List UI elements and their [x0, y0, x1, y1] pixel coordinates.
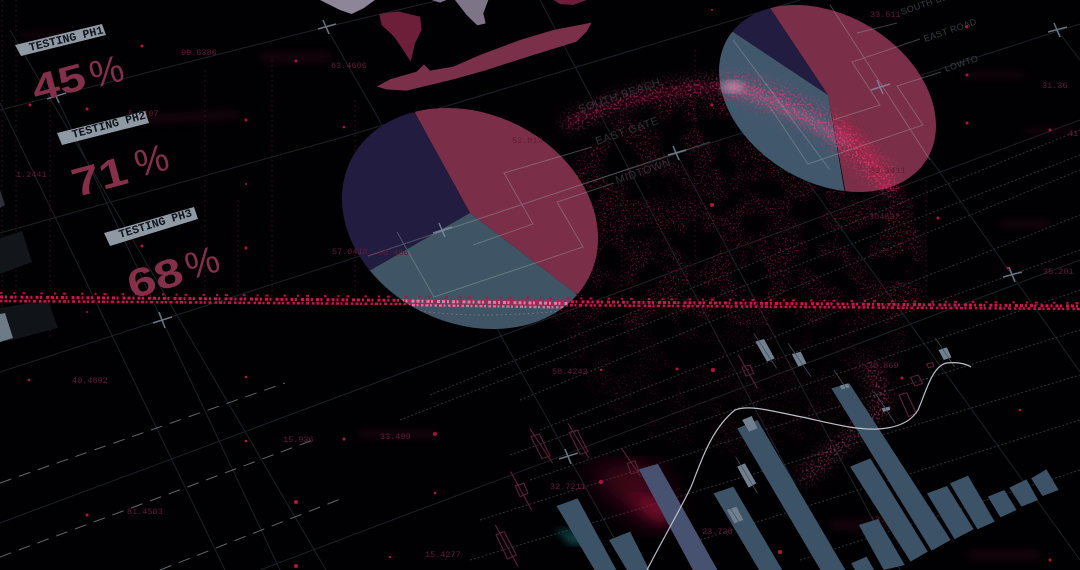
red numeric readouts: 50.406 — [378, 248, 409, 258]
North America — [320, 0, 375, 14]
stat 45 percent: % — [85, 48, 129, 97]
bottom red glow — [555, 463, 680, 545]
red numeric readouts: 32.7211 — [550, 482, 586, 492]
Asia fragment — [553, 0, 587, 5]
South America — [379, 11, 422, 62]
slice: slate — [370, 213, 577, 329]
trend curve — [647, 363, 971, 570]
red numeric readouts: 58.4243 — [552, 367, 588, 377]
slice: red — [770, 5, 936, 192]
particle band across pie 2 — [554, 65, 908, 492]
red numeric readouts: 30.869 — [868, 361, 899, 371]
location labels: LOWTO — [943, 53, 980, 74]
testing label 3: TESTING PH3 — [117, 207, 194, 242]
stat 45 percent: 45 — [27, 56, 90, 111]
stat 71 percent: 71 — [67, 149, 132, 206]
location labels: EAST ROAD — [922, 16, 978, 44]
red numeric readouts: 81.4583 — [127, 507, 163, 517]
red numeric readouts: 15.4277 — [425, 550, 461, 560]
Antarctica strip — [377, 23, 592, 91]
globe: particle field — [549, 76, 928, 458]
red numeric readouts: 99.6386 — [181, 48, 217, 58]
red numeric readouts: 63.4606 — [331, 61, 367, 71]
red numeric readouts: 31.36 — [1042, 81, 1068, 91]
pink waveform line — [0, 293, 1080, 325]
dashed lines lower left — [0, 383, 343, 570]
red numeric readouts: 304827 — [869, 212, 900, 222]
red numeric readouts: 35.201 — [1043, 267, 1074, 277]
stat 45 percent — [27, 48, 129, 111]
dotted grid lines lower right — [400, 130, 1080, 560]
red numeric readouts: 40.4892 — [72, 376, 108, 386]
slice: slate — [719, 32, 844, 191]
red numeric readouts: 13.016 — [870, 515, 901, 525]
stat 71 percent — [67, 137, 174, 206]
slice: navy — [732, 8, 828, 94]
location labels: SOUTH BEACH — [577, 76, 662, 116]
crosshair markers — [47, 20, 1067, 464]
location labels — [577, 0, 980, 187]
pie chart 2 — [719, 5, 936, 192]
red numeric readouts: 1.2441 — [16, 170, 47, 180]
slice: navy — [342, 112, 470, 270]
bar chart — [557, 383, 1059, 570]
stat 68 percent — [122, 239, 225, 308]
red numeric readouts: 33.409 — [380, 432, 411, 442]
map: world continents — [320, 0, 592, 91]
location labels: MIDTOWN — [614, 157, 673, 187]
faint red dotted vertical lines — [2, 0, 926, 340]
red numeric readouts: 30.1411 — [870, 166, 906, 176]
Africa — [432, 0, 488, 25]
stat 71 percent: % — [130, 137, 174, 186]
candlesticks — [495, 333, 955, 567]
red numeric readouts: 23.736 — [702, 527, 733, 537]
slice: red — [415, 108, 598, 294]
testing label 2: TESTING PH2 — [71, 110, 147, 142]
location labels: EAST GATE — [594, 115, 660, 148]
red numeric readouts: 33.511 — [870, 10, 901, 20]
red numeric readouts: 53.013 — [512, 136, 543, 146]
stat 68 percent: % — [180, 239, 225, 289]
red numeric readouts: 5.3107 — [128, 109, 159, 119]
stat 68 percent: 68 — [122, 249, 188, 308]
testing label 1: TESTING PH1 — [28, 25, 105, 55]
left edge grey blocks — [0, 190, 58, 342]
red numeric readouts: 57.0418 — [332, 247, 368, 257]
red numeric readouts: 15.936 — [283, 435, 314, 445]
connector lines — [368, 5, 941, 297]
pie chart 1 — [342, 108, 598, 329]
